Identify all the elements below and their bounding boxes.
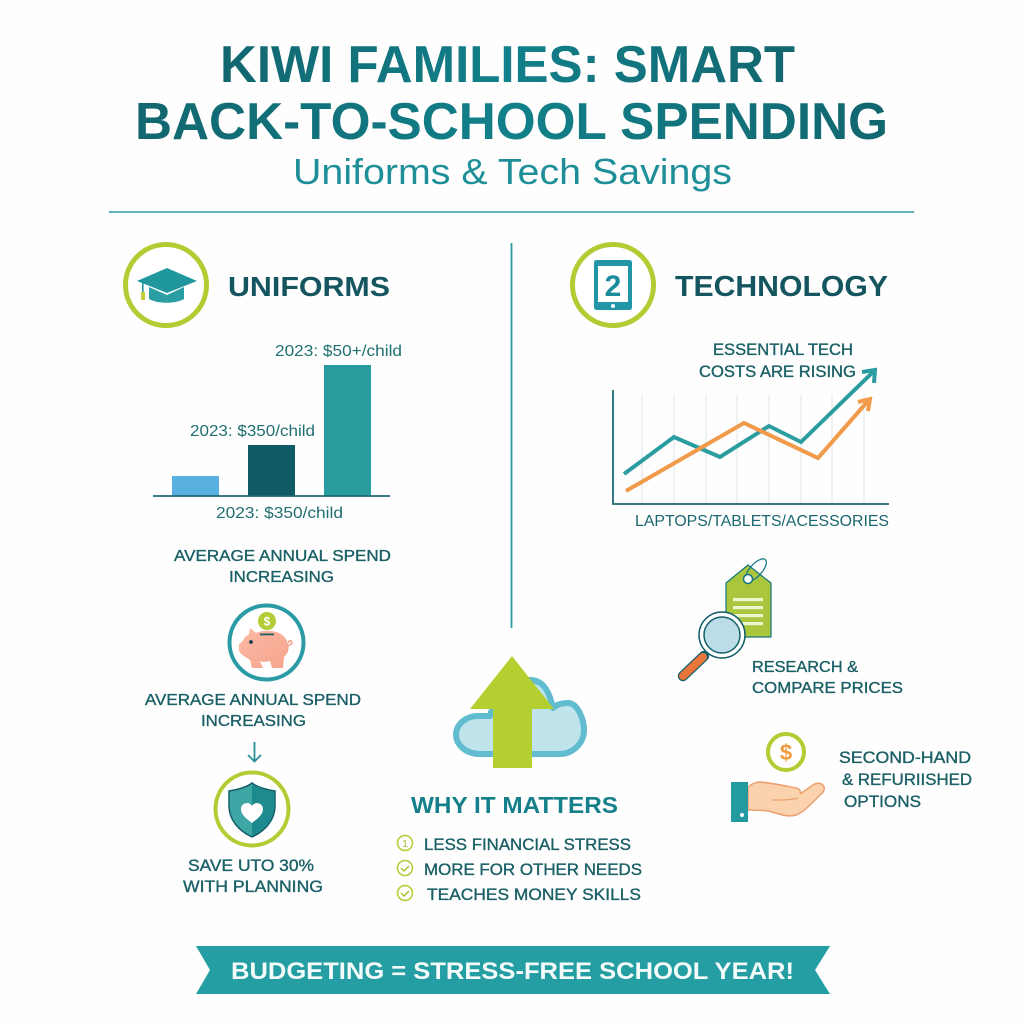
chart title: ESSENTIAL TECH	[713, 341, 853, 359]
text: save up to 30%	[183, 857, 323, 896]
icon: tablet: 2	[605, 270, 621, 303]
caption: average annual spend	[174, 548, 391, 586]
heading: uniforms: UNIFORMS	[228, 271, 390, 302]
panel: uniforms	[126, 244, 402, 896]
heading: why it matters: WHY IT MATTERS	[411, 792, 618, 818]
text: second-hand options: & REFURIISHED	[842, 771, 972, 789]
banner: BUDGETING = STRESS-FREE SCHOOL YEAR!	[231, 958, 794, 985]
chart title	[699, 341, 856, 381]
text: second-hand options	[839, 749, 972, 811]
icon: price tag and magnifier	[683, 556, 771, 676]
item: teaches money skills: TEACHES MONEY SKILLS	[427, 886, 641, 904]
subtitle: Uniforms & Tech Savings	[293, 151, 732, 192]
caption: average annual spend: INCREASING	[229, 569, 334, 586]
line chart: tech costs	[613, 370, 889, 504]
text: average annual spend: INCREASING	[201, 713, 306, 730]
caption: average annual spend: AVERAGE ANNUAL SPEND	[174, 548, 391, 565]
title	[135, 36, 888, 151]
icon: hand with coin	[731, 734, 824, 822]
text: research and compare: COMPARE PRICES	[752, 680, 903, 697]
icon: piggy bank: $	[264, 614, 271, 628]
icon: hand with coin: $	[780, 740, 792, 765]
chart title: COSTS ARE RISING	[699, 363, 856, 381]
text: average annual spend: AVERAGE ANNUAL SPEND	[145, 692, 361, 709]
bar chart: uniform spend: 2023: $350/child	[216, 505, 343, 522]
bar chart: uniform spend: 2023: $350/child	[190, 423, 315, 440]
icon: cloud with up arrow	[456, 656, 584, 768]
bar chart: uniform spend	[153, 343, 402, 522]
text: research and compare	[752, 659, 903, 697]
item: more for other needs: MORE FOR OTHER NEEDS	[424, 861, 642, 879]
icon: piggy bank	[230, 606, 304, 680]
panel: why it matters	[398, 656, 642, 904]
icon: shield with heart	[216, 772, 288, 846]
item: less financial stress: 1	[402, 838, 408, 850]
panel: technology	[572, 244, 972, 822]
text: save up to 30%: SAVE UTO 30%	[188, 857, 314, 875]
icon: tablet	[572, 244, 654, 326]
arrow: down	[248, 742, 261, 762]
text: save up to 30%: WITH PLANNING	[183, 878, 323, 896]
banner	[196, 946, 830, 994]
checklist	[398, 836, 642, 904]
text: second-hand options: SECOND-HAND	[839, 749, 971, 767]
title: KIWI FAMILIES: SMART	[220, 36, 795, 94]
bar chart: uniform spend: 2023: $50+/child	[275, 343, 402, 360]
heading: technology: TECHNOLOGY	[675, 271, 888, 303]
text: second-hand options: OPTIONS	[844, 793, 921, 811]
title: BACK-TO-SCHOOL SPENDING	[135, 93, 888, 151]
text: research and compare: RESEARCH &	[752, 659, 858, 676]
text: average annual spend	[145, 692, 361, 730]
chart axis label: LAPTOPS/TABLETS/ACESSORIES	[635, 513, 889, 530]
icon: graduation cap	[126, 244, 206, 326]
item: less financial stress: LESS FINANCIAL STRESS	[424, 836, 631, 854]
